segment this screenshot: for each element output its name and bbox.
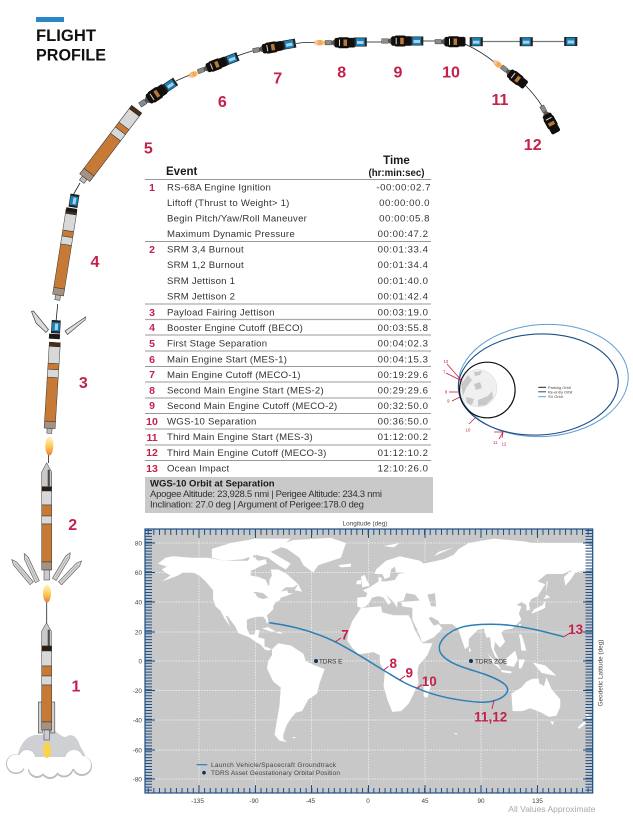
stage numbers: 9 <box>394 64 403 82</box>
longitude tick labels: -135 <box>191 798 204 805</box>
TDRS ZOE marker: TDRS ZOE <box>475 658 507 665</box>
groundtrack event callouts: 11,12 <box>474 710 507 724</box>
event names: SRM Jettison 2 <box>167 292 235 302</box>
event numbers: 10 <box>146 416 158 428</box>
event times: 00:04:15.3 <box>378 354 428 366</box>
event numbers: 11 <box>146 432 158 444</box>
stage numbers: 10 <box>442 64 460 82</box>
table rules <box>145 180 431 460</box>
event names: Booster Engine Cutoff (BECO) <box>167 323 303 334</box>
latitude tick labels: 20 <box>135 629 142 636</box>
table header: (hr:min:sec) <box>369 168 424 179</box>
event names: First Stage Separation <box>167 338 267 350</box>
orbit event labels: 12 <box>502 442 507 446</box>
event times: 00:03:55.8 <box>378 323 428 334</box>
orbit event labels: 10 <box>466 428 471 432</box>
stage numbers: 2 <box>68 517 77 534</box>
event names <box>167 182 337 474</box>
rocket: stage 12 <box>537 103 561 135</box>
groundtrack event callouts: 10 <box>422 674 437 689</box>
orbit event labels: 11 <box>493 440 498 445</box>
longitude tick labels <box>191 798 543 805</box>
event times: 00:36:50.0 <box>378 416 428 428</box>
event numbers: 7 <box>149 369 155 381</box>
stage numbers <box>68 64 542 696</box>
panel: WGS-10 orbit at separation: Apogee Altitude: 23,928.5 nmi | Perigee Altitude: 234.3 nmi <box>150 489 382 500</box>
rocket: stage 5 first stage separation <box>77 78 178 186</box>
longitude tick labels: 0 <box>366 798 370 805</box>
orbit legend: SV Orbit <box>548 394 564 399</box>
longitude tick labels: 135 <box>532 798 543 805</box>
latitude tick labels: -20 <box>133 688 142 695</box>
panel: WGS-10 orbit at separation: Inclination: 27.0 deg | Argument of Perigee:178.0 deg <box>150 500 364 510</box>
event numbers: 4 <box>149 322 155 334</box>
stage numbers: 5 <box>144 140 153 158</box>
rocket: stage 6 <box>187 53 239 79</box>
flame <box>45 436 53 456</box>
event names: Second Main Engine Cutoff (MECO-2) <box>167 401 337 412</box>
event times: -00:00:02.7 <box>376 182 431 194</box>
event names: Ocean Impact <box>167 464 229 474</box>
ocean background <box>145 529 593 793</box>
title: flight profile <box>36 17 106 64</box>
latitude axis title: Geodetic Latitude (deg) <box>598 640 604 706</box>
event numbers <box>146 182 158 475</box>
rocket: stage 9 <box>382 36 423 46</box>
event names: SRM 1,2 Burnout <box>167 260 244 271</box>
earth <box>460 370 497 407</box>
stage numbers: 11 <box>492 92 509 109</box>
groundtrack curve <box>269 623 563 702</box>
event names: Payload Fairing Jettison <box>167 308 275 318</box>
orbit event labels <box>443 359 507 446</box>
latitude tick labels: 0 <box>138 658 142 665</box>
event names: SRM Jettison 1 <box>167 276 235 287</box>
rocket: stage 7 <box>252 39 296 56</box>
event times: 00:19:29.6 <box>378 370 428 381</box>
panel: WGS-10 orbit at separation: WGS-10 Orbit at Separation <box>150 478 275 490</box>
latitude tick labels <box>133 540 142 783</box>
event times: 01:12:10.2 <box>378 448 428 459</box>
map legend: TDRS Asset Geostationary Orbital Position <box>211 770 340 777</box>
rocket: stage 1 liftoff with cloud <box>6 623 92 779</box>
event times: 00:00:47.2 <box>378 229 428 240</box>
black parking orbit <box>460 362 515 418</box>
latitude tick labels: -80 <box>133 776 142 783</box>
rocket: stage 10 spacecraft separation <box>435 36 577 47</box>
TDRS E marker: TDRS E <box>319 658 342 665</box>
flame <box>43 584 51 602</box>
orbit legend: Re-entry Orbit <box>548 389 573 394</box>
event times: 00:01:33.4 <box>378 244 429 256</box>
map frame and ticks <box>145 529 593 793</box>
flame <box>43 742 51 758</box>
groundtrack event callouts: 7 <box>341 627 349 642</box>
event names: SRM 3,4 Burnout <box>167 244 244 256</box>
event times <box>376 182 431 474</box>
latitude tick labels: -40 <box>133 717 142 724</box>
event numbers: 6 <box>149 354 155 366</box>
longitude axis title: Longitude (deg) <box>343 520 387 528</box>
event names: Third Main Engine Cutoff (MECO-3) <box>167 448 327 459</box>
event numbers: 12 <box>146 447 158 459</box>
groundtrack event callouts: 13 <box>568 622 584 637</box>
light blue SV orbit <box>455 319 632 442</box>
dark blue re-entry orbit <box>456 330 621 439</box>
event numbers: 2 <box>149 244 155 256</box>
flight trajectory lines <box>47 41 565 623</box>
event numbers: 1 <box>149 182 155 194</box>
event names: RS-68A Engine Ignition <box>167 182 271 194</box>
table header: Event <box>166 166 197 178</box>
longitude tick labels: -90 <box>249 798 259 805</box>
table header <box>166 155 424 179</box>
orbit diagram <box>443 319 632 446</box>
longitude tick labels: 90 <box>477 798 485 805</box>
stage numbers: 8 <box>337 64 346 82</box>
orbit event pointers <box>446 364 503 439</box>
event names: Maximum Dynamic Pressure <box>167 229 295 240</box>
continents <box>145 529 594 793</box>
event names: Main Engine Cutoff (MECO-1) <box>167 370 301 381</box>
event timeline table <box>145 155 431 475</box>
event names: Third Main Engine Start (MES-3) <box>167 432 313 443</box>
jettisoned boosters <box>10 552 83 585</box>
event numbers: 9 <box>149 400 155 412</box>
exhaust cloud <box>6 729 92 779</box>
vehicle body <box>42 623 52 740</box>
event numbers: 13 <box>146 463 158 475</box>
stage numbers: 6 <box>218 94 227 111</box>
event times: 00:03:19.0 <box>378 308 428 318</box>
stage numbers: 12 <box>524 137 542 154</box>
event names: WGS-10 Separation <box>167 416 257 428</box>
event numbers: 5 <box>149 338 155 350</box>
longitude tick labels: -45 <box>306 798 316 805</box>
event numbers: 3 <box>149 307 155 319</box>
rocket: stage 3 fairing jettison <box>32 311 86 456</box>
event names: Main Engine Start (MES-1) <box>167 354 287 366</box>
event times: 00:00:05.8 <box>379 214 430 224</box>
orbit event labels: 8 <box>445 390 448 394</box>
table header: Time <box>383 155 410 167</box>
map legend <box>197 762 340 777</box>
groundtrack event callouts: 8 <box>390 656 398 671</box>
map legend: Launch Vehicle/Spacecraft Groundtrack <box>211 762 337 769</box>
title: flight profile: PROFILE <box>36 46 106 64</box>
side boosters <box>38 702 55 733</box>
panel: WGS-10 orbit at separation <box>145 477 433 513</box>
orbit legend <box>538 385 573 399</box>
stage numbers: 3 <box>79 375 88 392</box>
stage numbers: 4 <box>91 254 100 271</box>
rocket: stage 11 <box>491 58 529 90</box>
orbit event labels: 7 <box>443 370 446 374</box>
stage numbers: 7 <box>273 70 282 88</box>
rocket: stage 8 <box>313 37 366 48</box>
title: flight profile: FLIGHT <box>36 26 97 45</box>
event names: Begin Pitch/Yaw/Roll Maneuver <box>167 214 308 224</box>
event times: 00:01:40.0 <box>378 276 428 287</box>
event times: 00:01:42.4 <box>378 292 429 302</box>
event times: 00:00:00.0 <box>379 198 430 209</box>
orbit event labels: 9 <box>447 398 450 404</box>
event names: Liftoff (Thrust to Weight> 1) <box>167 198 290 209</box>
latitude tick labels: 60 <box>135 570 142 577</box>
orbit legend: Parking Orbit <box>548 385 572 390</box>
fairing halves <box>32 311 86 334</box>
rocket: stage 4 booster cutoff <box>52 194 79 301</box>
event numbers: 8 <box>149 385 155 397</box>
latitude tick labels: -60 <box>133 747 142 754</box>
event times: 00:29:29.6 <box>378 386 428 396</box>
event times: 01:12:00.2 <box>378 432 428 443</box>
groundtrack event callouts <box>335 622 584 724</box>
latitude tick labels: 40 <box>135 599 142 606</box>
event times: 12:10:26.0 <box>378 464 428 474</box>
event times: 00:04:02.3 <box>378 338 428 350</box>
event times: 00:32:50.0 <box>378 401 428 412</box>
latitude tick labels: 80 <box>135 540 142 547</box>
footnote: All Values Approximate <box>508 804 596 814</box>
event times: 00:01:34.4 <box>378 260 429 271</box>
ground track world map <box>133 520 604 805</box>
groundtrack event callouts: 9 <box>406 666 413 680</box>
rocket: stage 2 SRM jettison <box>10 463 83 602</box>
longitude tick labels: 45 <box>421 798 429 805</box>
graticule <box>156 538 583 785</box>
orbit event labels: 13 <box>443 359 449 364</box>
stage numbers: 1 <box>72 678 81 696</box>
event names: Second Main Engine Start (MES-2) <box>167 386 324 396</box>
